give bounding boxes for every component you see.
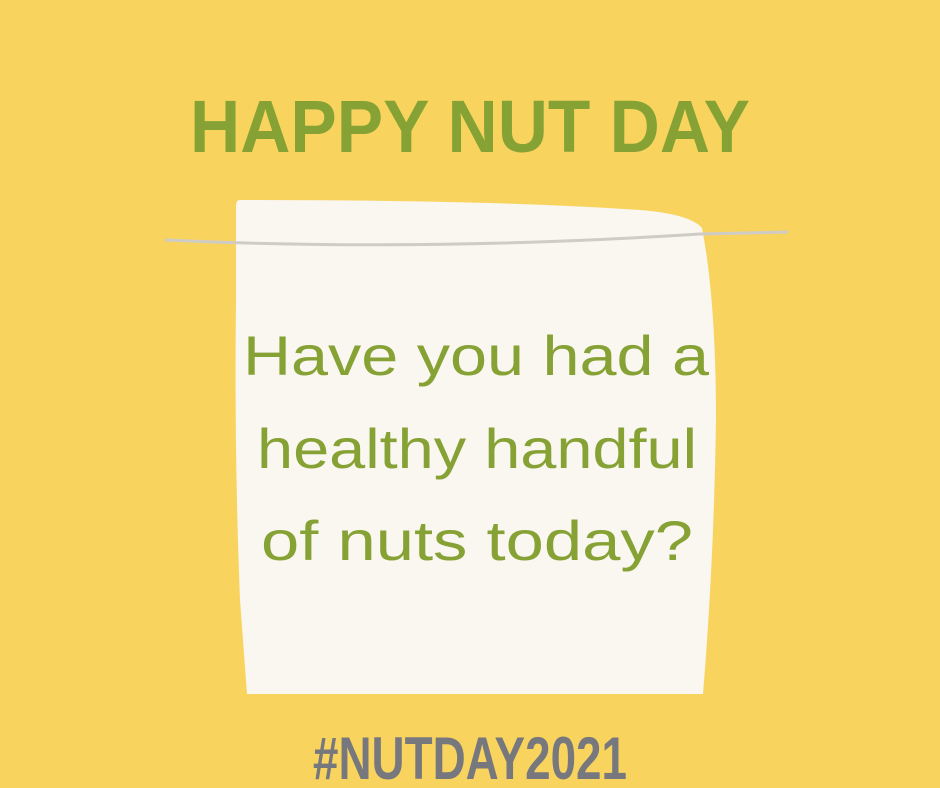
string line — [165, 232, 788, 245]
title: HAPPY NUT DAY — [190, 85, 750, 168]
note text — [243, 324, 710, 572]
panel: hanging paper note — [165, 200, 788, 694]
note text: of nuts today? — [261, 509, 693, 572]
note text: healthy handful — [257, 417, 697, 480]
note text: Have you had a — [243, 324, 710, 387]
